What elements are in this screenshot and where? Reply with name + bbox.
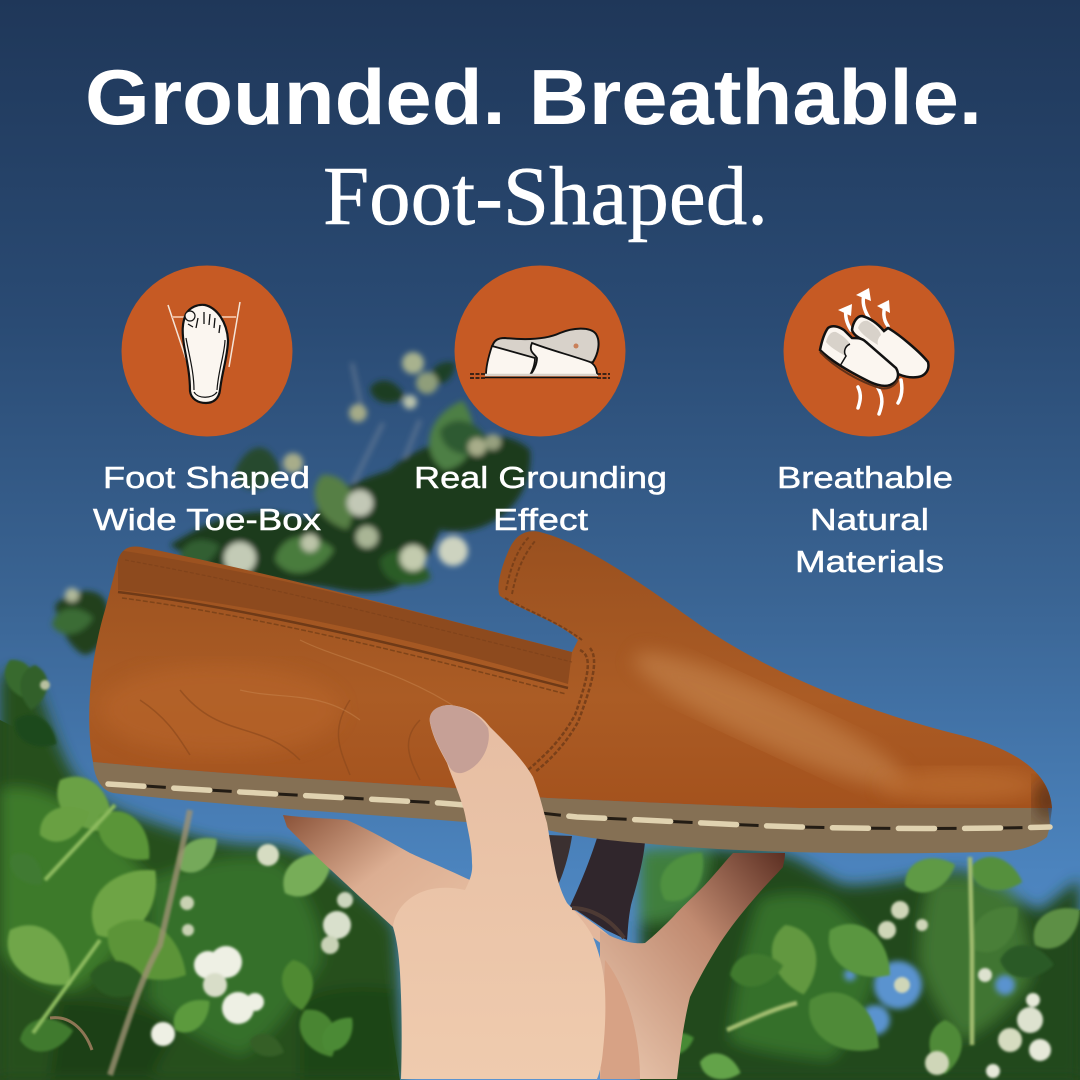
icon: shoe on ground — [454, 266, 626, 436]
title line one: Grounded. Breathable. — [85, 53, 982, 141]
label: breathable natural materials — [777, 460, 953, 579]
label: breathable natural materials: Breathable — [777, 460, 953, 495]
feature: breathable materials — [777, 266, 954, 579]
label: breathable natural materials: Materials — [795, 544, 944, 579]
label: real grounding effect: Effect — [493, 502, 588, 537]
leather highlights and seams — [100, 536, 1062, 822]
label: breathable natural materials: Natural — [810, 502, 929, 537]
ring — [572, 908, 624, 938]
product photo: leather shoe — [89, 531, 1062, 853]
label: foot shaped wide toe-box — [93, 460, 322, 537]
foliage: lower right bush — [640, 841, 1080, 1080]
hand: back fingers — [283, 815, 785, 1079]
fingernail — [430, 705, 489, 773]
foliage: lower left bush — [0, 654, 405, 1080]
label: real grounding effect — [414, 460, 667, 537]
shoe upper — [89, 531, 1052, 808]
title line two: Foot-Shaped. — [323, 150, 768, 243]
shoe sole — [93, 762, 1050, 853]
icon: shoes with air arrows — [784, 266, 954, 436]
feature: real grounding — [414, 266, 667, 537]
label: foot shaped wide toe-box: Foot Shaped — [103, 460, 310, 495]
label: foot shaped wide toe-box: Wide Toe-Box — [93, 502, 322, 537]
icon: foot in wide toe-box — [122, 266, 292, 436]
feature: wide toe-box — [93, 266, 322, 537]
label: real grounding effect: Real Grounding — [414, 460, 667, 495]
sole stitching — [108, 784, 1050, 828]
foliage: upper centre branch — [50, 352, 530, 655]
hand: palm and raised finger — [393, 705, 624, 1079]
sole stitching gaps — [100, 783, 1050, 828]
